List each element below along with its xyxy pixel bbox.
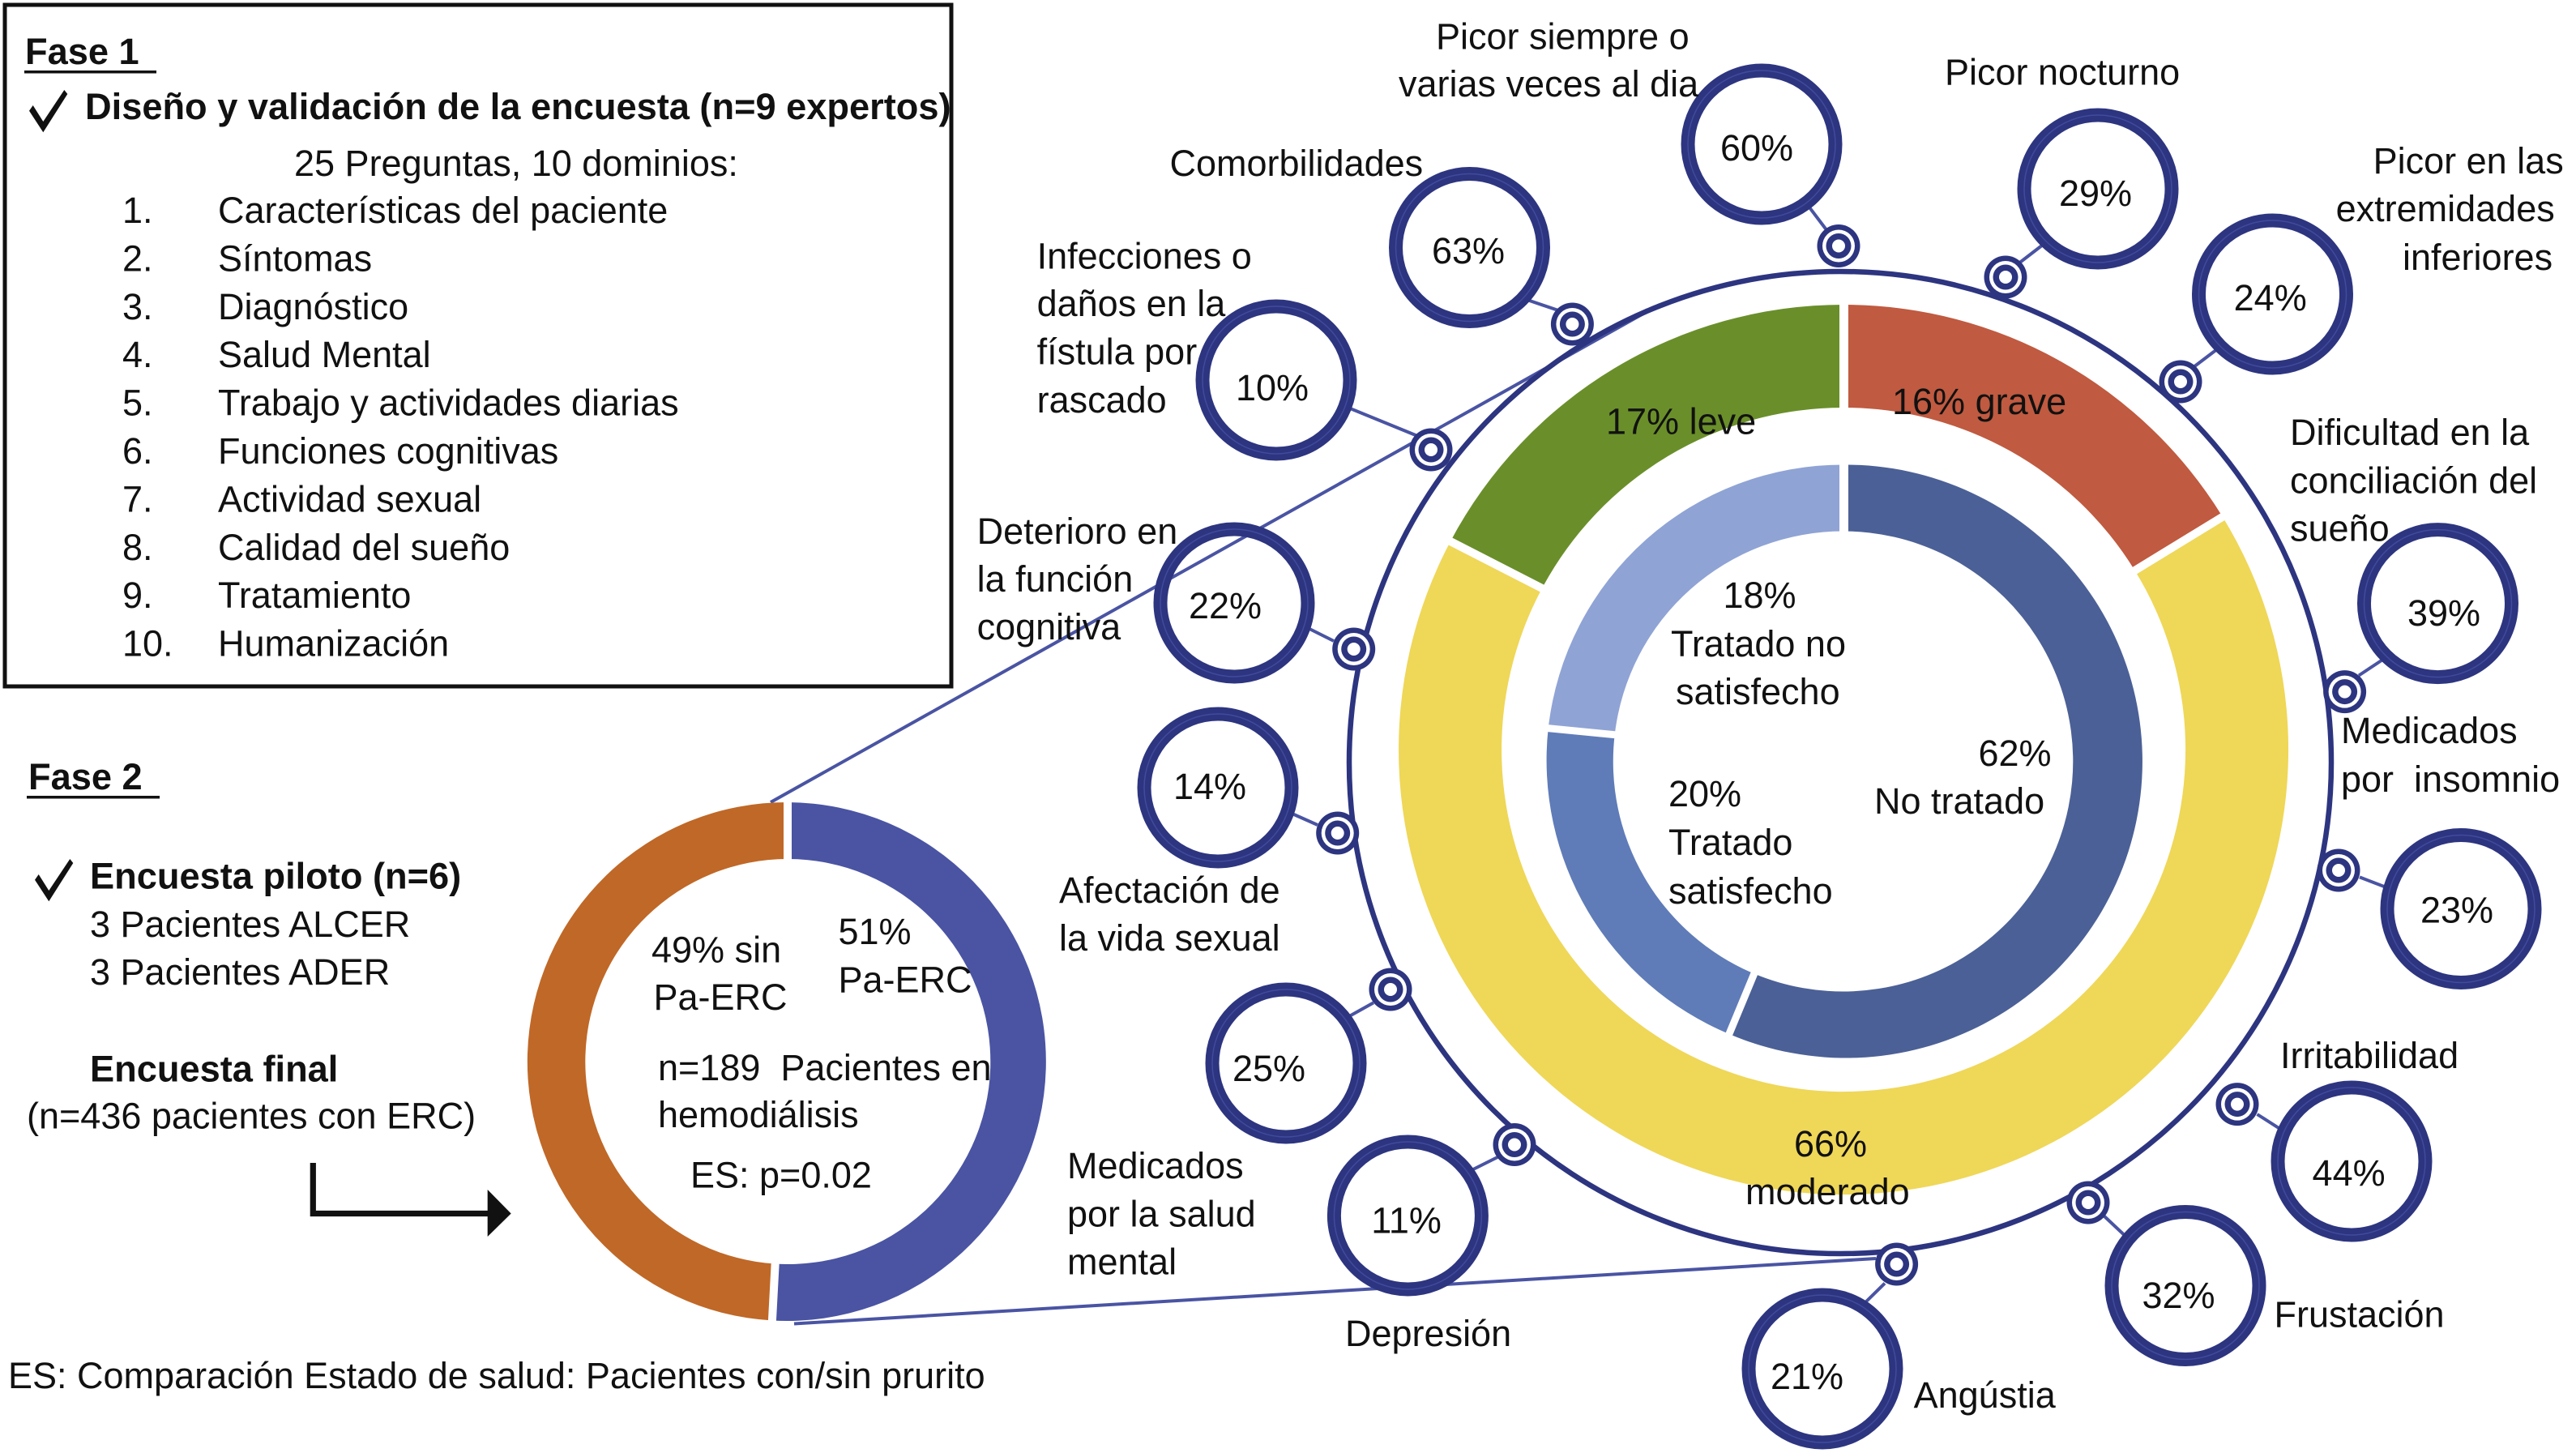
callout: angústia 21% bbox=[1749, 1243, 2057, 1442]
label: 16% grave: 16% grave bbox=[1892, 381, 2066, 422]
callout: extremidades inferiores 24%: 24% bbox=[2234, 277, 2307, 318]
segment: 62% no tratado bbox=[1729, 464, 2142, 1058]
callout: dificultad conciliación 39% bbox=[2290, 412, 2537, 713]
list: ten domains: Salud Mental bbox=[218, 334, 431, 375]
ring chart: treatment status bbox=[1543, 460, 2142, 1058]
callout: dificultad conciliación 39%: Dificultad en la bbox=[2290, 412, 2530, 453]
text: pilot survey: Encuesta piloto (n=6) bbox=[90, 856, 461, 896]
label: 20% tratado satisfecho bbox=[1668, 773, 1833, 912]
label: 18% tratado no satisfecho: satisfecho bbox=[1676, 671, 1840, 712]
list: ten domains: 9. bbox=[122, 575, 153, 616]
callout: función cognitiva 22%: Deterioro en bbox=[977, 511, 1177, 552]
label: 66% moderado: moderado bbox=[1745, 1171, 1910, 1212]
icon: check mark bbox=[35, 859, 73, 901]
label: sample size bbox=[658, 1047, 992, 1135]
callout: angústia 21%: Angústia bbox=[1914, 1374, 2057, 1416]
text: final survey: Encuesta final bbox=[90, 1049, 338, 1089]
footnote: ES comparison: ES: Comparación Estado de salud: Pacientes con/sin prurito bbox=[8, 1355, 985, 1396]
callout: función cognitiva 22%: 22% bbox=[1189, 585, 1262, 626]
callout: vida sexual 14%: Afectación de bbox=[1059, 870, 1280, 911]
callout: comorbilidades 63%: 63% bbox=[1432, 230, 1505, 271]
arrow: to patient donut bbox=[313, 1163, 511, 1237]
list: ten domains: 10. bbox=[122, 623, 173, 665]
callout: angústia 21%: 21% bbox=[1771, 1356, 1843, 1397]
label: 51% Pa-ERC: Pa-ERC bbox=[838, 959, 972, 1001]
label: sample size: hemodiálisis bbox=[658, 1094, 859, 1135]
callout: medicados salud mental 25%: mental bbox=[1067, 1241, 1177, 1283]
label: 20% tratado satisfecho: 20% bbox=[1668, 773, 1741, 814]
callout: función cognitiva 22%: la función bbox=[977, 558, 1133, 600]
callout: comorbilidades 63% bbox=[1170, 143, 1594, 345]
list: ten domains: 2. bbox=[122, 237, 153, 279]
text: pilot survey bbox=[90, 856, 461, 993]
subheading: survey design: Diseño y validación de la encuesta (n=9 expertos) bbox=[85, 86, 951, 127]
list: ten domains: 4. bbox=[122, 334, 153, 375]
callout: comorbilidades 63%: Comorbilidades bbox=[1170, 143, 1423, 184]
callout: medicados por insomnio 23%: por insomnio bbox=[2341, 759, 2560, 800]
ring chart: itch severity bbox=[1399, 300, 2288, 1212]
label: p value: ES: p=0.02 bbox=[690, 1154, 872, 1196]
label: 49% sin Pa-ERC bbox=[651, 929, 788, 1018]
callout: medicados por insomnio 23%: Medicados bbox=[2341, 710, 2518, 751]
callout: dificultad conciliación 39%: conciliación del bbox=[2290, 460, 2537, 501]
callout: picor nocturno 29% bbox=[1945, 52, 2180, 298]
callout: depresión 11%: Depresión bbox=[1345, 1313, 1511, 1354]
label: 18% tratado no satisfecho: Tratado no bbox=[1671, 623, 1846, 665]
callout: frustación 32% bbox=[2066, 1182, 2445, 1360]
label: 62% no tratado: No tratado bbox=[1874, 780, 2044, 822]
callout: infecciones 10% bbox=[1037, 236, 1452, 472]
label: 66% moderado bbox=[1745, 1123, 1910, 1212]
callout: depresión 11% bbox=[1334, 1123, 1536, 1354]
list: ten domains: 6. bbox=[122, 430, 153, 472]
callout: extremidades inferiores 24%: inferiores bbox=[2403, 237, 2553, 278]
list: ten domains: 7. bbox=[122, 478, 153, 519]
list: ten domains: Tratamiento bbox=[218, 575, 411, 616]
label: 18% tratado no satisfecho: 18% bbox=[1723, 575, 1796, 616]
label: 51% Pa-ERC: 51% bbox=[838, 911, 912, 952]
list: ten domains: Síntomas bbox=[218, 237, 372, 279]
callout: irritabilidad 44% bbox=[2215, 1035, 2459, 1235]
segment: 18% tratado no satisfecho bbox=[1549, 464, 1844, 735]
list: ten domains: 3. bbox=[122, 286, 153, 327]
outer ring of main chart bbox=[1349, 271, 2331, 1254]
label: sample size: n=189 Pacientes en bbox=[658, 1047, 992, 1088]
label: 51% Pa-ERC bbox=[838, 911, 972, 1001]
label: 66% moderado: 66% bbox=[1794, 1123, 1867, 1165]
label: 62% no tratado: 62% bbox=[1979, 733, 2052, 774]
list: ten domains: Trabajo y actividades diarias bbox=[218, 382, 679, 424]
list: ten domains bbox=[122, 190, 679, 665]
callout: frustación 32%: 32% bbox=[2142, 1275, 2215, 1316]
list: ten domains: 5. bbox=[122, 382, 153, 424]
zoom lines: patient donut to main chart bbox=[771, 310, 1876, 1324]
callout: infecciones 10%: Infecciones o bbox=[1037, 236, 1252, 277]
heading: Fase 1: Fase 1 bbox=[25, 31, 139, 72]
label: 18% tratado no satisfecho bbox=[1671, 575, 1846, 712]
callout: medicados salud mental 25%: 25% bbox=[1232, 1048, 1305, 1089]
callout: infecciones 10%: 10% bbox=[1236, 367, 1309, 408]
callout: extremidades inferiores 24% bbox=[2159, 140, 2564, 404]
callout: medicados salud mental 25%: Medicados bbox=[1067, 1145, 1244, 1186]
callout: picor siempre 60% bbox=[1399, 16, 1860, 267]
list: ten domains: 8. bbox=[122, 527, 153, 568]
segment: 66% moderado bbox=[1399, 517, 2288, 1194]
callout: frustación 32%: Frustación bbox=[2274, 1294, 2445, 1335]
callout: función cognitiva 22% bbox=[977, 511, 1375, 677]
segment: 49% sin Pa-ERC bbox=[528, 802, 788, 1321]
text: pilot survey: 3 Pacientes ADER bbox=[90, 951, 390, 993]
callout: picor siempre 60%: 60% bbox=[1720, 127, 1793, 169]
donut chart: patients with and without Pa-ERC bbox=[528, 798, 1046, 1326]
panel: Fase 2 bbox=[27, 756, 511, 1237]
callout: irritabilidad 44%: 44% bbox=[2313, 1152, 2386, 1194]
label: 20% tratado satisfecho: Tratado bbox=[1668, 822, 1792, 863]
icon: check mark bbox=[29, 90, 67, 132]
segment: 17% leve bbox=[1450, 305, 1843, 588]
panel: Fase 1 bbox=[5, 5, 951, 686]
callout: función cognitiva 22%: cognitiva bbox=[977, 606, 1121, 647]
callout: dificultad conciliación 39%: sueño bbox=[2290, 508, 2390, 549]
callout: extremidades inferiores 24%: extremidades bbox=[2336, 188, 2555, 229]
text: questions and domains: 25 Preguntas, 10 dominios: bbox=[294, 143, 738, 184]
callout: medicados por insomnio 23%: 23% bbox=[2420, 890, 2493, 931]
callout: depresión 11%: 11% bbox=[1371, 1200, 1442, 1241]
callout: medicados por insomnio 23% bbox=[2318, 710, 2560, 982]
callout: picor nocturno 29%: Picor nocturno bbox=[1945, 52, 2180, 92]
label: 62% no tratado bbox=[1874, 733, 2052, 822]
list: ten domains: Diagnóstico bbox=[218, 286, 408, 327]
list: ten domains: Características del paciente bbox=[218, 190, 668, 231]
callout: infecciones 10%: rascado bbox=[1037, 379, 1167, 421]
callout: picor nocturno 29%: 29% bbox=[2059, 173, 2132, 214]
label: 17% leve: 17% leve bbox=[1606, 400, 1756, 442]
list: ten domains: Actividad sexual bbox=[218, 478, 481, 519]
label: 49% sin Pa-ERC: 49% sin bbox=[651, 929, 781, 971]
callout: medicados salud mental 25% bbox=[1067, 968, 1412, 1283]
list: ten domains: Calidad del sueño bbox=[218, 527, 510, 568]
callout: infecciones 10%: daños en la bbox=[1037, 283, 1226, 324]
text: final survey bbox=[27, 1049, 476, 1137]
text: final survey: (n=436 pacientes con ERC) bbox=[27, 1096, 476, 1137]
callout: vida sexual 14%: la vida sexual bbox=[1059, 917, 1280, 959]
callout: irritabilidad 44%: Irritabilidad bbox=[2280, 1035, 2459, 1076]
label: 49% sin Pa-ERC: Pa-ERC bbox=[653, 977, 788, 1018]
list: ten domains: 1. bbox=[122, 190, 153, 231]
segment: 16% grave bbox=[1843, 305, 2223, 571]
segment: 51% Pa-ERC bbox=[772, 802, 1046, 1321]
callout: medicados salud mental 25%: por la salud bbox=[1067, 1194, 1256, 1235]
callout: picor siempre 60%: varias veces al dia bbox=[1399, 63, 1699, 105]
segment: 20% tratado satisfecho bbox=[1547, 729, 1754, 1034]
text: pilot survey: 3 Pacientes ALCER bbox=[90, 904, 410, 945]
callout: vida sexual 14%: 14% bbox=[1173, 766, 1246, 807]
callout: extremidades inferiores 24%: Picor en las bbox=[2373, 140, 2564, 182]
callout: dificultad conciliación 39%: 39% bbox=[2407, 592, 2480, 634]
heading: Fase 2: Fase 2 bbox=[28, 756, 143, 797]
callout: picor siempre 60%: Picor siempre o bbox=[1436, 16, 1690, 58]
list: ten domains: Funciones cognitivas bbox=[218, 430, 558, 472]
list: ten domains: Humanización bbox=[218, 623, 449, 665]
label: 20% tratado satisfecho: satisfecho bbox=[1668, 870, 1833, 912]
callout: infecciones 10%: fístula por bbox=[1037, 331, 1197, 373]
callout: vida sexual 14% bbox=[1059, 714, 1359, 959]
